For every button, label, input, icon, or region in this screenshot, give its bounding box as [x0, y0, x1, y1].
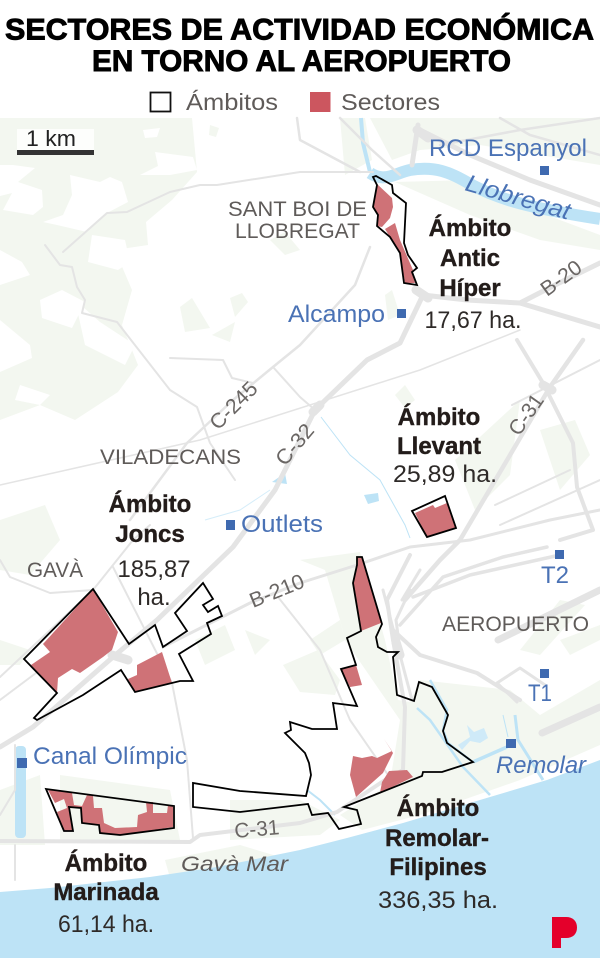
label: Ámbito Remolar-Filipines [378, 794, 498, 914]
label: Canal Olímpic: Canal Olímpic [33, 743, 187, 770]
sector: Antic Híper [373, 176, 417, 285]
label: Remolar: Remolar [496, 752, 587, 779]
label: Ámbito Joncs: ha. [137, 584, 171, 611]
label: Ámbito Antic Híper: Ámbito [429, 214, 511, 242]
sector: Remolar-Filipines [193, 557, 473, 829]
label: Ámbito Marinada: 61,14 ha. [58, 911, 154, 938]
label: T2 terminal [541, 550, 569, 589]
label: Sant Boi de Llobregat: LLOBREGAT [235, 220, 360, 243]
label: Alcampo: Alcampo [288, 301, 385, 328]
label: Outlets: Outlets [241, 511, 323, 538]
label: T1 terminal: T1 [528, 680, 552, 707]
title: EN TORNO AL AEROPUERTO [92, 45, 511, 78]
map: green land patches [0, 118, 600, 878]
sector: Llevant [412, 496, 456, 537]
legend [150, 89, 440, 115]
label: Ámbito Antic Híper: Híper [439, 275, 501, 302]
road label: C-31 coast: C-31 [233, 816, 280, 843]
label: Sant Boi de Llobregat: SANT BOI DE [228, 198, 367, 221]
label: Ámbito Remolar-Filipines: Remolar- [385, 825, 489, 852]
label: Aeropuerto: AEROPUERTO [442, 613, 589, 636]
road label: C-245: C-245 [205, 377, 263, 435]
title [5, 12, 594, 78]
sector: Marinada [46, 789, 174, 835]
label: Ámbito Marinada: Marinada [53, 879, 159, 906]
label: Ámbito Joncs: Joncs [115, 521, 185, 548]
legend: Ámbitos [186, 89, 278, 115]
label: RCD Espanyol: RCD Espanyol [429, 135, 587, 162]
label: Llobregat river: Llobregat [462, 170, 575, 226]
label: Ámbito Remolar-Filipines: 336,35 ha. [378, 887, 498, 914]
icon: publisher logo [552, 917, 577, 948]
label: RCD Espanyol [429, 135, 587, 175]
road label: C-31 airport: C-31 [504, 390, 549, 440]
label: Remolar [496, 739, 587, 779]
map: white urban blocks [0, 128, 197, 405]
label: Gavà: GAVÀ [27, 559, 83, 582]
label: Ámbito Joncs [109, 490, 191, 611]
label: T1 terminal [528, 669, 552, 707]
label: Ámbito Llevant [393, 403, 497, 488]
label: Viladecans: VILADECANS [100, 446, 241, 469]
label: Ámbito Llevant: Ámbito [398, 403, 480, 431]
road label: C-32: C-32 [271, 419, 319, 470]
label: Ámbito Llevant: Llevant [397, 433, 481, 460]
label: Ámbito Antic Híper: 17,67 ha. [424, 307, 522, 334]
label: Ámbito Marinada [53, 849, 159, 938]
label: Ámbito Remolar-Filipines: Filipines [389, 854, 487, 881]
map: road network [0, 118, 600, 880]
label: Ámbito Joncs: Ámbito [109, 490, 191, 518]
sector: Joncs [24, 583, 222, 720]
scale bar: 1 km: 1 km [26, 126, 76, 151]
label: Ámbito Antic Híper [424, 214, 522, 334]
label: Sant Boi de Llobregat [228, 198, 367, 243]
label: Ámbito Llevant: 25,89 ha. [393, 461, 497, 488]
label: Ámbito Marinada: Ámbito [65, 849, 147, 877]
label: Ámbito Remolar-Filipines: Ámbito [397, 794, 479, 822]
label: Ámbito Joncs: 185,87 [118, 556, 190, 583]
label: Gavà Mar: Gavà Mar [181, 853, 289, 876]
legend: Sectores [341, 89, 440, 115]
scale bar: 1 km [17, 126, 94, 155]
label: Ámbito Antic Híper: Antic [440, 245, 500, 272]
road label: B-20: B-20 [536, 256, 586, 301]
title: SECTORES DE ACTIVIDAD ECONÓMICA [5, 12, 594, 46]
road label: B-210: B-210 [246, 570, 308, 613]
label: T2 terminal: T2 [541, 562, 569, 589]
